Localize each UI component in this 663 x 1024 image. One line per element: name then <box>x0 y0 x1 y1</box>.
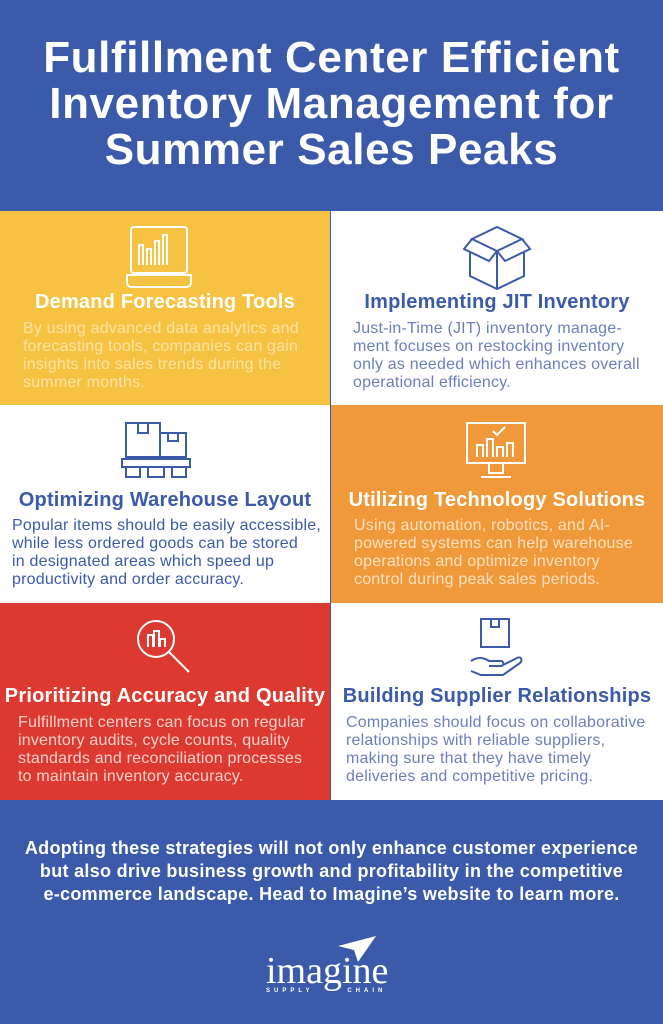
text: in designated areas which speed up <box>12 553 274 570</box>
icon: open box <box>462 226 532 290</box>
text: standards and reconciliation processes <box>18 750 302 767</box>
icon: hand with box <box>470 618 522 676</box>
heading: Utilizing Technology Solutions <box>349 489 645 511</box>
text: while less ordered goods can be stored <box>12 535 298 552</box>
text: control during peak sales periods. <box>354 571 600 588</box>
text: Fulfillment centers can focus on regular <box>18 714 305 731</box>
text <box>346 714 646 785</box>
text: forecasting tools, companies can gain <box>23 338 298 355</box>
text <box>23 320 299 391</box>
heading: Building Supplier Relationships <box>343 685 651 707</box>
text: summer months. <box>23 374 145 391</box>
heading: Prioritizing Accuracy and Quality <box>5 685 325 707</box>
panel: demand forecasting <box>0 211 330 405</box>
icon: monitor chart <box>466 422 526 478</box>
title: Fulfillment Center Efficient <box>43 33 620 82</box>
text: operational efficiency. <box>353 374 511 391</box>
text: By using advanced data analytics and <box>23 320 299 337</box>
text <box>354 517 633 588</box>
text: powered systems can help warehouse <box>354 535 633 552</box>
panel: supplier <box>331 603 663 800</box>
text: operations and optimize inventory <box>354 553 600 570</box>
text <box>353 320 640 391</box>
text: Popular items should be easily accessible, <box>12 517 321 534</box>
text: to maintain inventory accuracy. <box>18 768 244 785</box>
wordmark: imagine <box>266 950 388 992</box>
closing text <box>25 838 638 904</box>
title <box>43 33 620 174</box>
panel: technology <box>331 405 663 603</box>
text: Just-in-Time (JIT) inventory manage- <box>353 320 622 337</box>
text: productivity and order accuracy. <box>12 571 244 588</box>
heading: Demand Forecasting Tools <box>35 291 295 313</box>
text: ment focuses on restocking inventory <box>353 338 624 355</box>
closing text: but also drive business growth and profitability in the competitive <box>40 861 623 881</box>
panel: accuracy <box>0 603 330 800</box>
logo <box>266 936 388 994</box>
icon: laptop chart <box>126 226 192 288</box>
text: Companies should focus on collaborative <box>346 714 646 731</box>
title: Summer Sales Peaks <box>105 125 558 174</box>
text: making sure that they have timely <box>346 750 591 767</box>
panel: warehouse layout <box>0 405 330 603</box>
text: relationships with reliable suppliers, <box>346 732 605 749</box>
icon: pallet boxes <box>121 422 191 478</box>
text: deliveries and competitive pricing. <box>346 768 593 785</box>
heading: Optimizing Warehouse Layout <box>19 489 311 511</box>
heading: Implementing JIT Inventory <box>364 291 630 313</box>
closing text: Adopting these strategies will not only enhance customer experience <box>25 838 638 858</box>
text: Using automation, robotics, and AI- <box>354 517 610 534</box>
closing text: e-commerce landscape. Head to Imagine’s website to learn more. <box>43 884 620 904</box>
title: Inventory Management for <box>49 79 614 128</box>
text <box>12 517 321 588</box>
icon: paper plane <box>338 936 376 962</box>
text: inventory audits, cycle counts, quality <box>18 732 290 749</box>
text <box>18 714 305 785</box>
panel: JIT <box>331 211 663 405</box>
text: only as needed which enhances overall <box>353 356 640 373</box>
icon: magnifier chart <box>137 620 190 673</box>
tagline: SUPPLY CHAIN <box>266 988 386 994</box>
text: insights into sales trends during the <box>23 356 281 373</box>
